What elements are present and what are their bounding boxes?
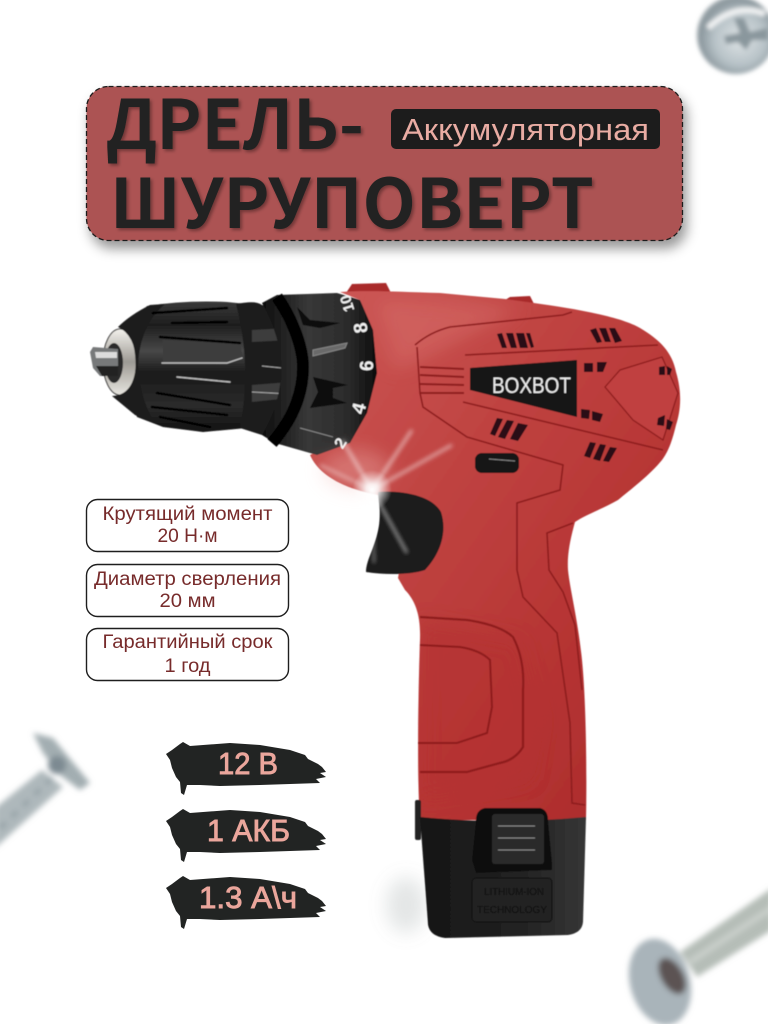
decorative screw: bottom right: [620, 888, 768, 1024]
collar numbers: 6: [357, 360, 378, 371]
side ribs: [420, 367, 464, 393]
banner background: [86, 86, 682, 240]
body panel lines: [415, 312, 663, 805]
spec card: warranty: Гарантийный срок: [102, 632, 273, 653]
drill bit jaws: [90, 347, 118, 376]
chuck sleeve: [128, 302, 247, 432]
collar numbers: 10: [337, 293, 358, 314]
second sleeve: [236, 302, 292, 435]
spec card: torque: Крутящий момент: [102, 504, 273, 525]
subtitle pill: Аккумуляторная: [402, 112, 649, 147]
rear nose panel: [605, 357, 678, 440]
collar numbers: 2: [332, 435, 351, 452]
decorative screw: top right: [697, 0, 768, 74]
collar numbers: 4: [348, 400, 371, 416]
trigger: [366, 492, 443, 574]
brush badge: battery count: [166, 809, 326, 862]
steel ring: [103, 329, 137, 395]
spec card: torque: 20 Н·м: [158, 526, 218, 547]
battery shadow: [386, 877, 426, 933]
brand plate: [470, 360, 577, 417]
drill body: [310, 283, 680, 820]
battery latch: [472, 808, 552, 873]
chuck: [90, 293, 378, 455]
battery label: TECHNOLOGY: [477, 904, 547, 916]
decorative screw: left: [0, 733, 90, 848]
sleeve grooves: [152, 308, 242, 427]
brand plate: BOXBOT: [492, 373, 571, 398]
brush badge: capacity: 1.3 А\ч: [199, 880, 297, 915]
brush badge: voltage: [166, 742, 326, 795]
work light sparkle: [320, 430, 452, 563]
collar shading: [297, 307, 348, 408]
spec card: torque: [86, 500, 288, 552]
spec card: drilling diameter: Диаметр сверления: [94, 569, 281, 590]
heading: second line: ШУРУПОВЕРТ: [110, 149, 594, 248]
direction switch: [475, 453, 519, 473]
collar numbers: [332, 293, 378, 452]
brush badge: voltage: 12 В: [218, 746, 278, 781]
air vents: [490, 328, 673, 462]
drill illustration: [90, 283, 680, 938]
torque collar: [262, 293, 377, 455]
brush badge: battery count: 1 АКБ: [207, 813, 290, 848]
heading: first line: ДРЕЛЬ-: [106, 70, 364, 169]
spec card: warranty: 1 год: [164, 656, 210, 677]
spec card: drilling diameter: 20 мм: [160, 591, 216, 612]
battery: [415, 800, 586, 938]
battery label: [472, 878, 552, 922]
battery label: LITHIUM-ION: [484, 886, 544, 898]
spec card: drilling diameter: [86, 564, 288, 616]
title banner: [86, 70, 682, 248]
spec card: warranty: [86, 628, 288, 680]
collar numbers: 8: [350, 321, 373, 334]
black ring: [272, 297, 303, 443]
brush badge: capacity: [166, 876, 326, 929]
